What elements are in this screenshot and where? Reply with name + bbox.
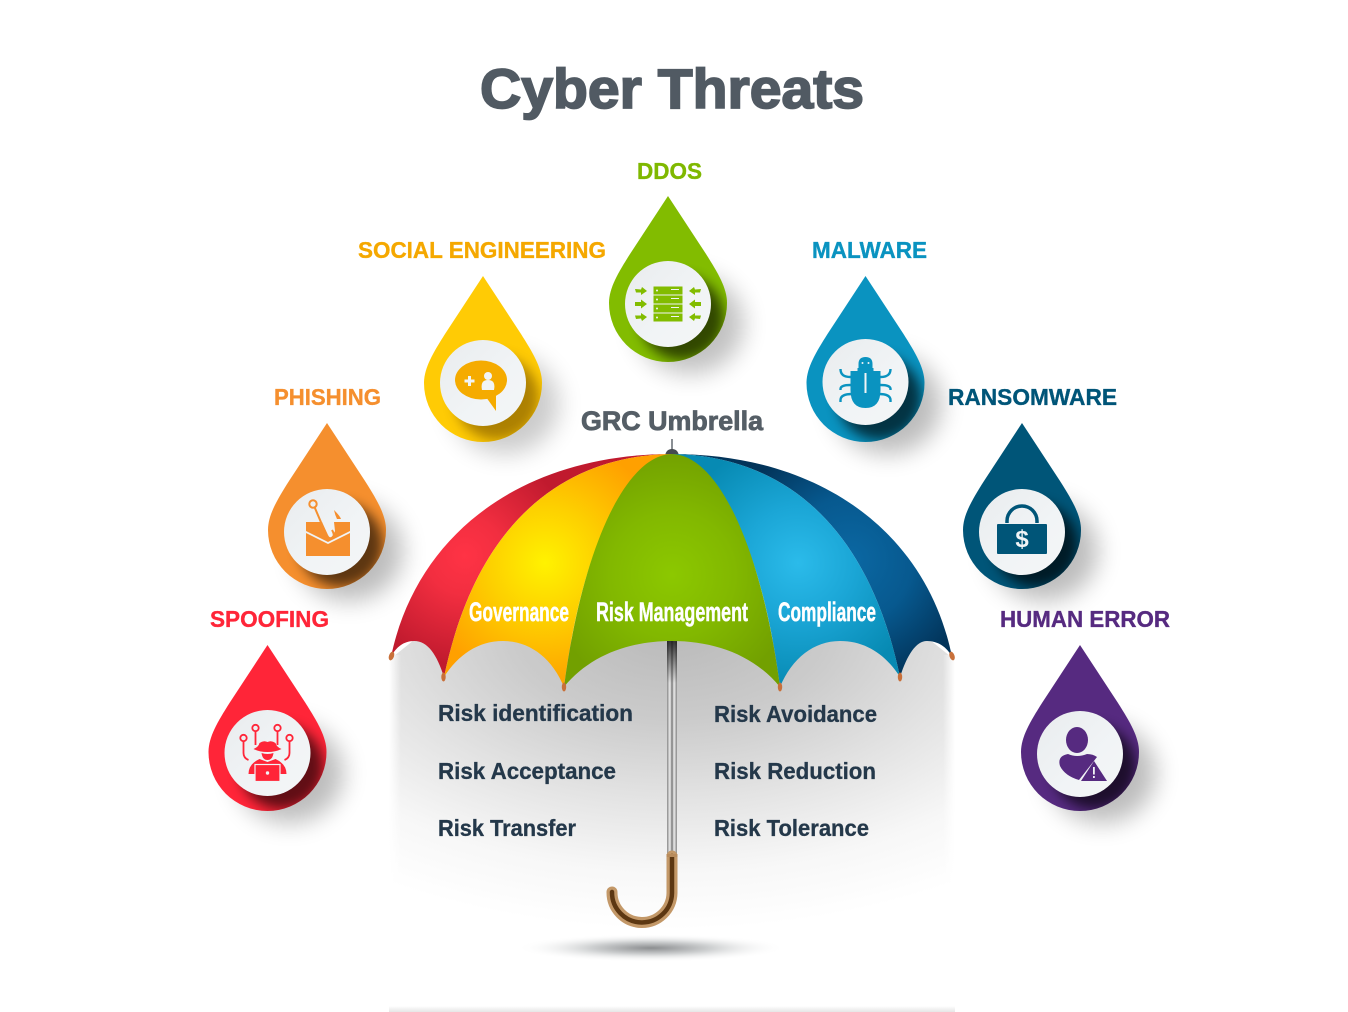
ransomware drop <box>963 423 1098 601</box>
canopy label: Compliance: Compliance <box>778 597 876 627</box>
icon: padlock with dollar <box>997 506 1047 554</box>
threat: phishing <box>268 384 403 601</box>
top ferrule <box>665 439 679 456</box>
title: Cyber Threats <box>480 57 864 120</box>
social engineering label: SOCIAL ENGINEERING <box>358 237 606 263</box>
umbrella heading: GRC Umbrella <box>581 406 764 436</box>
spoofing label: SPOOFING <box>210 606 329 632</box>
malware drop <box>806 276 942 454</box>
umbrella shaft <box>667 638 677 856</box>
compliance risk list: Risk Tolerance <box>714 815 869 841</box>
icon: hacker <box>240 725 293 782</box>
icon: padlock with dollar: $ <box>1015 526 1029 553</box>
threat: malware <box>806 237 942 454</box>
icon: hooked envelope <box>306 500 350 556</box>
canopy panel: Compliance blue <box>672 454 900 687</box>
canopy panel: Risk Management green <box>564 454 780 687</box>
canopy panel: navy <box>672 454 952 677</box>
human error label: HUMAN ERROR <box>1000 606 1170 632</box>
compliance risk list: Risk Avoidance <box>714 701 877 727</box>
threat: spoofing <box>208 606 344 823</box>
rib tips <box>388 651 956 692</box>
phishing label: PHISHING <box>274 384 381 410</box>
umbrella shaded area beneath canopy <box>389 640 955 1012</box>
ransomware label: RANSOMWARE <box>948 384 1117 410</box>
threat: human error <box>1000 606 1170 823</box>
compliance risk list <box>714 701 877 841</box>
icon: server under attack <box>635 286 701 322</box>
canopy label: Governance: Governance <box>469 597 569 627</box>
threat: ransomware <box>948 384 1117 601</box>
phishing drop <box>268 423 403 601</box>
icon: chat bubble with user <box>455 360 507 411</box>
threat: social engineering <box>358 237 606 454</box>
social engineering drop <box>424 276 559 454</box>
governance risk list <box>438 700 633 841</box>
canopy panel: Governance yellow <box>444 454 672 687</box>
ddos drop <box>609 196 744 374</box>
icon: person with warning <box>1059 727 1107 781</box>
threat: ddos <box>609 158 744 374</box>
malware label: MALWARE <box>812 237 927 263</box>
ground shadow <box>516 934 786 962</box>
governance risk list: Risk Acceptance <box>438 758 616 784</box>
governance risk list: Risk identification <box>438 700 633 726</box>
governance risk list: Risk Transfer <box>438 815 576 841</box>
icon: bug <box>840 357 890 408</box>
umbrella <box>388 439 956 922</box>
compliance risk list: Risk Reduction <box>714 758 876 784</box>
ddos label: DDOS <box>637 158 702 184</box>
human error drop <box>1021 645 1156 823</box>
canopy panel: red <box>391 454 672 677</box>
canopy label: Risk Management: Risk Management <box>596 597 748 627</box>
umbrella handle <box>612 854 678 922</box>
spoofing drop <box>208 645 344 823</box>
